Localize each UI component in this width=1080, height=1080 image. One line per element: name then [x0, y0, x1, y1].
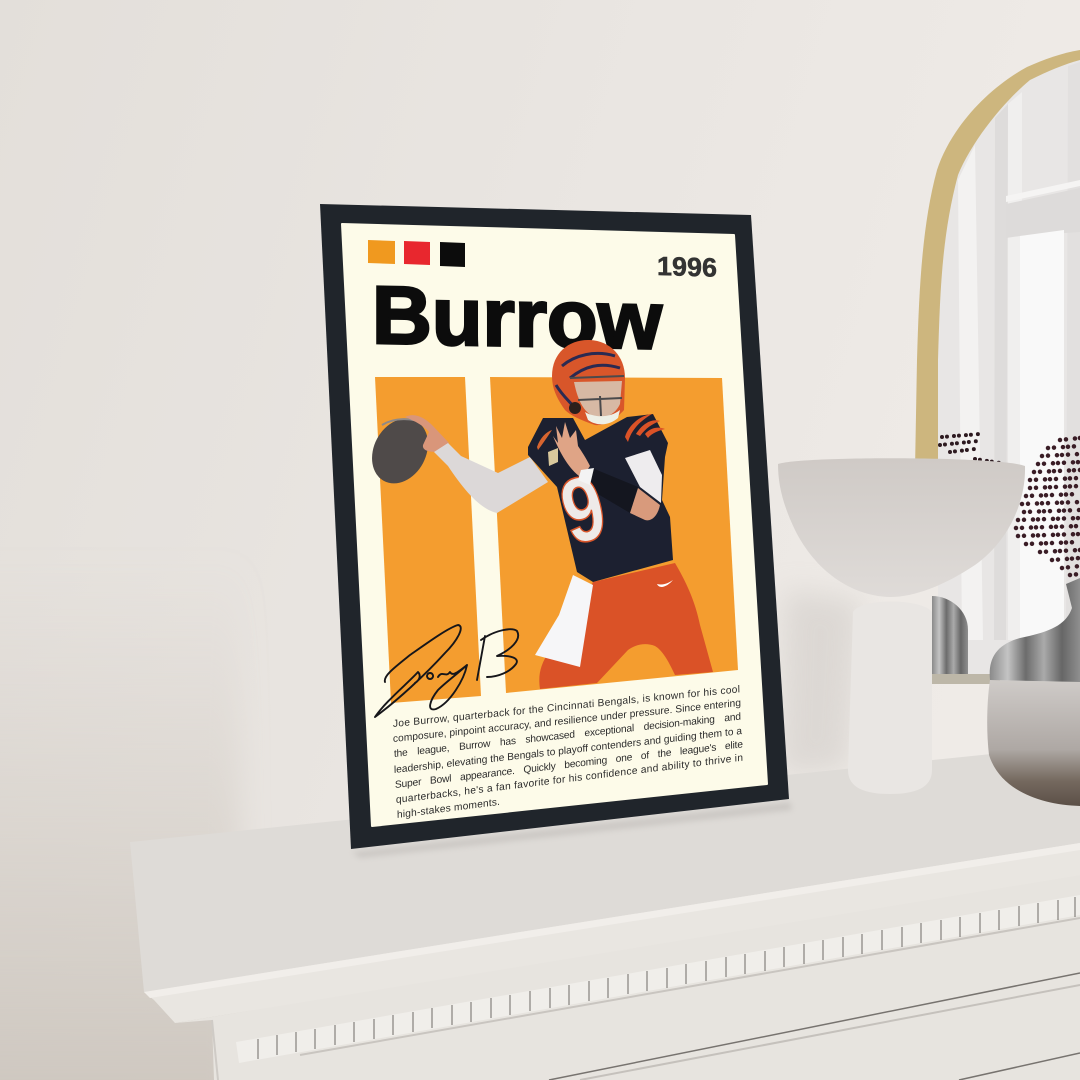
throwing hand	[405, 415, 449, 452]
vase	[987, 578, 1080, 806]
jersey	[528, 414, 673, 582]
forearm	[586, 468, 638, 513]
dentil lines	[258, 897, 1075, 1059]
arched mirror	[915, 50, 1080, 684]
helmet visor bar	[570, 376, 624, 416]
year: 1996	[657, 251, 717, 283]
mirror gold frame	[915, 50, 1080, 470]
window light	[1020, 230, 1064, 640]
throwing arm sleeve	[434, 443, 548, 513]
helmet stripes	[556, 353, 620, 408]
pants	[539, 563, 713, 689]
face	[574, 381, 622, 418]
left orange panel	[375, 377, 481, 703]
chin guard	[585, 410, 620, 424]
body text: quarterbacks, he's a fan favorite for his confidence and ability to thrive in	[396, 753, 743, 806]
swatch orange	[368, 240, 395, 264]
vase chrome shoulder	[990, 578, 1080, 682]
orange panels	[375, 377, 738, 703]
player figure	[361, 340, 713, 689]
lower moulding lines	[300, 918, 1080, 1055]
small chrome reflection	[932, 596, 968, 674]
body text: leadership, elevating the Bengals to playoff contenders and guiding them to a	[394, 726, 742, 776]
shoulder stripes	[537, 414, 665, 450]
towel	[535, 575, 593, 667]
mirror bottom edge	[932, 674, 1000, 684]
elbow	[630, 488, 660, 520]
body text: composure, pinpoint accuracy, and resilience under pressure. Since entering	[393, 698, 741, 745]
swatch red	[404, 241, 430, 265]
poster paper	[342, 224, 767, 826]
wrist tape	[578, 468, 594, 485]
body text: Super Bowl appearance. Quickly becoming one of the league's elite	[395, 739, 743, 791]
football	[361, 409, 439, 493]
body text: the league, Burrow has showcased exceptional decision-making and	[394, 712, 741, 760]
title: Burrow	[372, 270, 662, 367]
dried flowers behind bowl	[940, 434, 1000, 463]
signature	[375, 625, 518, 717]
right orange panel	[490, 377, 738, 693]
front hand	[553, 422, 590, 478]
vase glass body	[987, 680, 1080, 806]
cornice band	[144, 843, 1080, 1023]
right sleeve	[625, 450, 662, 503]
dried flowers over vase	[1016, 438, 1080, 575]
body text: high-stakes moments.	[397, 797, 500, 821]
ear hole	[569, 402, 581, 414]
bowl	[778, 458, 1025, 597]
dentil strip	[236, 895, 1080, 1063]
mantel leg edge	[212, 1020, 218, 1080]
curtain folds	[958, 62, 1080, 640]
marble pedestal	[848, 602, 932, 794]
mantel shelf top	[130, 745, 1080, 992]
nike logo	[657, 580, 673, 587]
body text	[393, 684, 743, 821]
jersey chest patch	[548, 448, 558, 466]
poster colour swatches	[368, 240, 465, 267]
mantel moulding	[144, 843, 1080, 1080]
mirror glass with curtains	[938, 60, 1080, 680]
body text: Joe Burrow, quarterback for the Cincinnati Bengals, is known for his cool	[393, 684, 740, 730]
poster frame shadow	[352, 802, 792, 858]
jersey number: 9	[551, 455, 616, 564]
poster frame	[320, 204, 789, 849]
swatch black	[440, 242, 465, 267]
mantel face	[175, 875, 1080, 1080]
helmet	[552, 340, 625, 425]
